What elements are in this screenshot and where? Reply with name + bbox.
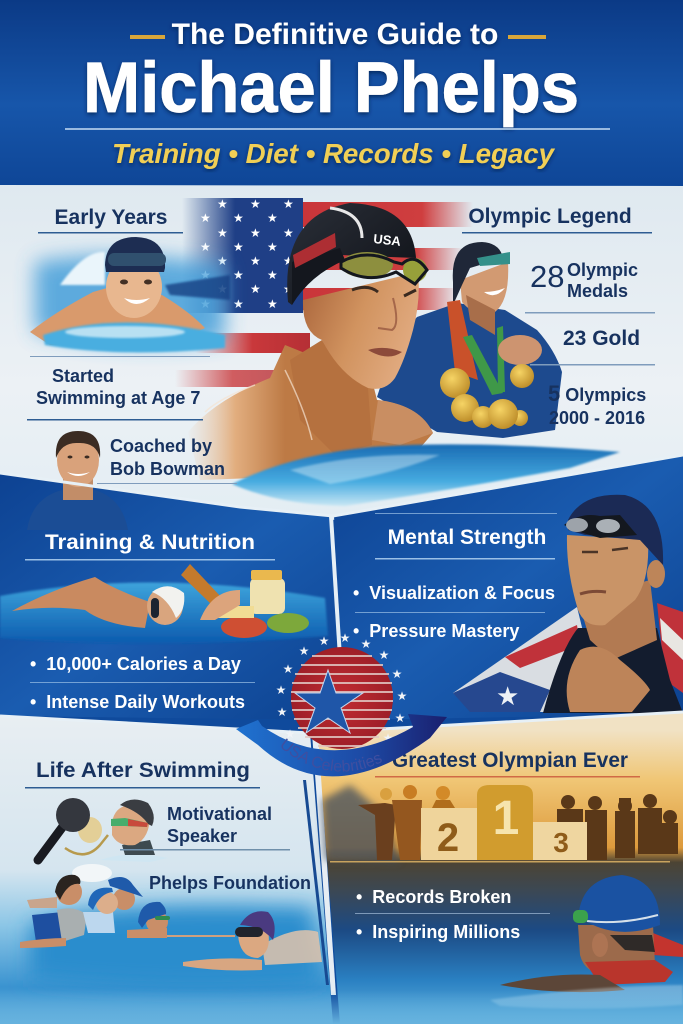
text: records broken: • Records Broken [356,887,511,907]
american flag: ★★★ [217,282,294,296]
icon: microphone [38,798,108,860]
image: athlete with flag [453,495,683,713]
text: pressure: • Pressure Mastery [353,621,519,641]
panel: greatest olympian ever [312,712,683,1024]
panel: life after swimming [0,716,333,1024]
american flag: ★★★ [200,211,278,225]
badge: USA Celebrities [236,631,447,776]
american flag: ★★★ [200,297,278,311]
stars ring [276,631,407,745]
stars ring: ★ [379,648,389,662]
silhouette crowd [358,785,678,860]
image: speaker [100,799,168,862]
bottom water fade [0,990,683,1024]
podium: 1 [493,792,519,845]
panel: header [0,0,683,190]
stars ring: ★ [383,731,393,745]
text: started swimming: Started [52,366,114,386]
podium [421,785,587,860]
image: athlete with flag: ★ [496,681,519,711]
american flag: ★★★ [200,240,278,254]
image: swimmer and food [0,564,328,644]
stars ring: ★ [340,631,350,645]
heading: mental strength: Mental Strength [388,526,546,549]
image: pool with children [20,864,322,989]
american flag: ★★★ [217,254,294,268]
stars ring: ★ [276,683,286,697]
ribbon text: USA Celebrities [282,738,382,772]
text: phelps foundation: Phelps Foundation [149,873,311,893]
panel: mental strength [334,455,683,720]
olympic legend figure with medals [377,242,562,438]
panel: training and nutrition [0,473,344,720]
stat: 5 olympics: 5 Olympics [548,381,646,406]
text: inspiring millions: • Inspiring Millions [356,922,520,942]
pool water below main swimmer [232,444,620,506]
stat: 5 olympics [530,364,655,428]
text: started swimming: Swimming at Age 7 [36,388,200,408]
stars ring: ★ [283,662,293,676]
stars ring: ★ [395,711,405,725]
stars ring: ★ [285,727,295,741]
stat: 28 olympic medals: Olympic [567,260,638,280]
title: the definitive guide to: The Definitive Guide to [172,18,498,51]
stat: 5 olympics: 2000 - 2016 [549,408,645,428]
main swimmer [188,203,433,480]
text: motivational speaker: Motivational [167,804,272,824]
american flag: ★★★ [217,226,294,240]
title: Michael Phelps: Michael Phelps [83,49,579,128]
stat: 28 olympic medals: 28 [530,259,564,294]
panel dividers [0,455,683,733]
heading: early years: Early Years [55,206,167,229]
image: coach bob bowman [27,431,128,530]
image: young swimmer [30,237,230,352]
heading: training and nutrition: Training & Nutrition [45,531,255,554]
text: coached by: Coached by [110,436,212,456]
image: swimmer in blue cap [490,875,683,1009]
stars ring: ★ [299,644,309,658]
stars ring: ★ [397,689,407,703]
stars ring: ★ [361,637,371,651]
main swimmer: USA [373,231,402,249]
podium: 2 [437,816,459,860]
stars ring: ★ [319,634,329,648]
stat: 23 gold: 23 Gold [563,327,640,350]
text: workouts: • Intense Daily Workouts [30,692,245,712]
american flag: ★★★ [200,268,278,282]
heading: olympic legend: Olympic Legend [468,205,632,228]
stars ring: ★ [277,705,287,719]
subtitle: Training • Diet • Records • Legacy [112,138,555,169]
heading: life after swimming: Life After Swimming [36,759,250,782]
stars ring: ★ [392,667,402,681]
top panel text and stats [27,205,655,484]
text: visualization: • Visualization & Focus [353,583,555,603]
stat: 28 olympic medals: Medals [567,281,628,301]
american flag [175,197,473,387]
panel divider: life and greatest [303,780,329,985]
text: calories: • 10,000+ Calories a Day [30,654,241,674]
heading: greatest olympian ever: Greatest Olympian Ever [392,749,628,772]
panel: top story background [0,185,683,520]
american flag: ★★★ [217,197,294,211]
text: motivational speaker: Speaker [167,826,237,846]
podium: 3 [553,827,569,858]
text: coached by: Bob Bowman [110,459,225,479]
distant crowd shading [322,785,400,862]
stat: 28 olympic medals [525,259,655,314]
